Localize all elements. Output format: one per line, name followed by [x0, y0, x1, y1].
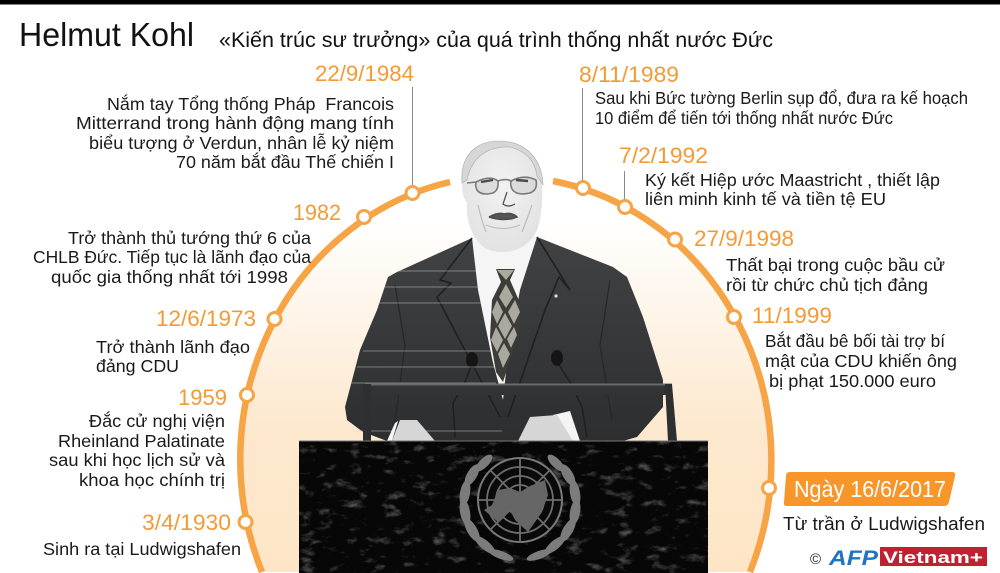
event: 7/2/1992 — [619, 143, 940, 209]
event: 3/4/1930 — [43, 510, 241, 559]
event: 8/11/1989: 10 điểm để tiến tới thống nhất nước Đức — [595, 108, 893, 128]
event: 27/9/1998: 27/9/1998 — [694, 226, 794, 251]
event: 1982 — [33, 200, 341, 287]
microphones — [453, 350, 587, 437]
event: 8/11/1989 — [579, 62, 968, 128]
event: death date badge: Ngày 16/6/2017 — [794, 476, 946, 502]
event: 1982: Trở thành thủ tướng thứ 6 của — [68, 228, 311, 248]
logo: AFP Vietnam+ credit: Vietnam+ — [883, 548, 983, 567]
hair — [462, 141, 543, 185]
subtitle: «Kiến trúc sư trưởng» của quá trình thống nhất nước Đức — [219, 28, 773, 52]
event: 3/4/1930: Sinh ra tại Ludwigshafen — [43, 539, 241, 559]
timeline arc — [240, 181, 771, 572]
event: 22/9/1984: 70 năm bắt đầu Thế chiến I — [176, 151, 394, 172]
event: 1982: quốc gia thống nhất tới 1998 — [51, 267, 288, 287]
timeline dots — [239, 182, 776, 528]
peach background inside arc — [240, 181, 771, 572]
suit — [345, 237, 663, 441]
logo: AFP Vietnam+ credit: © — [810, 551, 821, 568]
event: 12/6/1973: đảng CDU — [96, 356, 179, 376]
event: 11/1999 — [752, 303, 957, 391]
event: 1959: 1959 — [178, 385, 227, 410]
event: 11/1999: bị phạt 150.000 euro — [769, 371, 936, 391]
podium with UN emblem — [299, 441, 708, 573]
event: 22/9/1984: biểu tượng ở Verdun, nhân lễ kỷ niệm — [89, 132, 394, 153]
event: 11/1999: mật của CDU khiến ông — [765, 351, 957, 371]
podium rail — [363, 384, 677, 441]
event: 1959: Rheinland Palatinate — [58, 431, 225, 451]
event: 12/6/1973: Trở thành lãnh đạo — [96, 337, 250, 357]
event: 1982: 1982 — [293, 200, 341, 225]
event: 12/6/1973: 12/6/1973 — [156, 306, 256, 331]
event: 1959: Đắc cử nghị viện — [89, 410, 225, 431]
event: 22/9/1984: 22/9/1984 — [315, 61, 414, 86]
event: 11/1999: 11/1999 — [752, 303, 832, 328]
event: 7/2/1992: 7/2/1992 — [619, 143, 708, 168]
shirt — [472, 237, 537, 400]
event: 1959 — [49, 385, 227, 490]
event: 12/6/1973 — [96, 306, 256, 376]
event: 22/9/1984: Mitterrand trong hành động mang tính — [76, 113, 394, 133]
event: 22/9/1984: Nắm tay Tổng thống Pháp Francois — [107, 93, 394, 114]
event: 7/2/1992: liên minh kinh tế và tiền tệ EU — [645, 189, 886, 209]
event: 1959: sau khi học lịch sử và — [49, 450, 225, 470]
pin — [554, 294, 558, 298]
event: death date badge: Từ trần ở Ludwigshafen — [783, 514, 985, 534]
event: 22/9/1984 — [76, 61, 414, 172]
logo: AFP Vietnam+ credit — [810, 547, 987, 570]
UN emblem — [458, 452, 582, 563]
event: 8/11/1989: Sau khi Bức tường Berlin sụp đổ, đưa ra kế hoạch — [595, 88, 968, 108]
hands and cuffs — [387, 411, 580, 441]
event: 27/9/1998 — [694, 226, 945, 295]
marble texture — [299, 441, 708, 573]
portrait of Helmut Kohl at the podium — [345, 141, 677, 441]
event: 3/4/1930: 3/4/1930 — [142, 510, 231, 535]
event: death date badge — [783, 472, 985, 534]
faint horizontal lines across suit — [350, 271, 502, 431]
event: 7/2/1992: Ký kết Hiệp ước Maastricht , thiết lập — [645, 170, 940, 190]
event: 11/1999: Bắt đầu bê bối tài trợ bí — [765, 330, 945, 351]
neck and head — [462, 141, 542, 252]
glasses — [467, 177, 536, 194]
tie — [490, 269, 521, 382]
event: 27/9/1998: rồi từ chức chủ tịch đảng — [726, 275, 928, 295]
lapel edges — [437, 237, 570, 417]
logo: AFP Vietnam+ credit: AFP — [828, 547, 879, 570]
event: 1982: CHLB Đức. Tiếp tục là lãnh đạo của — [33, 247, 311, 267]
top black bar — [0, 0, 1000, 4]
leader lines — [412, 87, 624, 200]
event: 1959: khoa học chính trị — [79, 470, 225, 490]
facial features — [478, 180, 532, 232]
event: 8/11/1989: 8/11/1989 — [579, 62, 679, 87]
event: 27/9/1998: Thất bại trong cuộc bầu cử — [726, 255, 945, 275]
suit shadow folds — [392, 280, 612, 440]
title: Helmut Kohl — [19, 16, 194, 53]
